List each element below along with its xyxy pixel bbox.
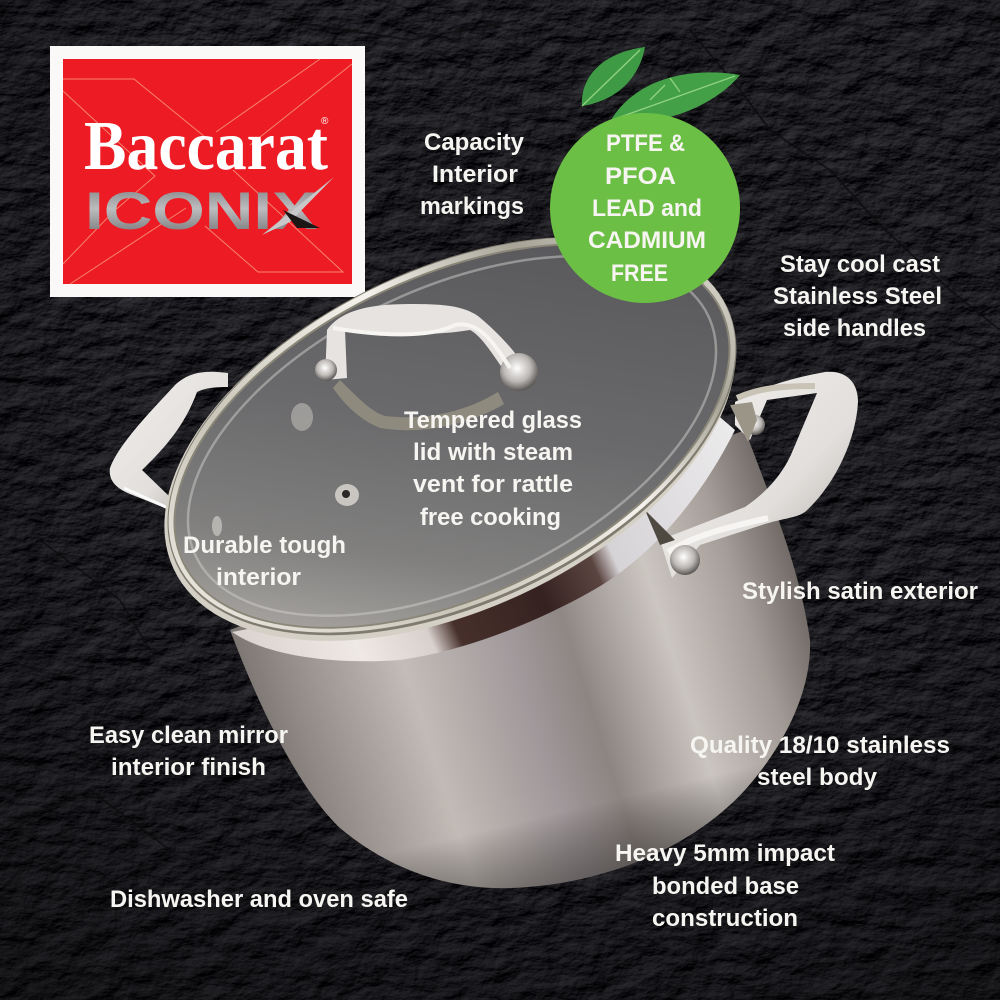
label: satin exterior: Stylish satin exterior	[742, 578, 978, 605]
badge: green free-from circle	[550, 113, 740, 303]
lid rivet: lower	[212, 516, 222, 536]
label: side handles: Stay cool cast	[780, 251, 940, 278]
label: capacity markings	[420, 129, 525, 220]
logo word: ICONIX: ICONIX	[85, 182, 317, 241]
left side handle	[110, 372, 228, 508]
label: durable interior: interior	[216, 564, 301, 591]
label: PTFE and PFOA free	[588, 130, 706, 287]
label: tempered glass lid	[404, 407, 582, 531]
pot body, satin steel	[230, 400, 810, 888]
label: impact bonded base	[615, 840, 835, 932]
brand logo: Baccarat Iconix	[50, 46, 365, 297]
polished band below rim	[232, 400, 735, 661]
label: tempered glass lid: lid with steam	[413, 439, 573, 466]
leaf: back	[582, 47, 645, 106]
label: dishwasher safe: Dishwasher and oven safe	[110, 886, 408, 913]
label: mirror interior: interior finish	[111, 754, 266, 781]
label: stainless body: steel body	[757, 764, 878, 791]
logo X swoosh	[262, 177, 334, 235]
label: side handles: Stainless Steel	[773, 283, 942, 310]
label: stainless body	[690, 732, 950, 791]
label: tempered glass lid: free cooking	[420, 504, 561, 531]
label: capacity markings: Capacity	[424, 129, 525, 156]
right side handle	[645, 372, 858, 578]
label: durable interior: Durable tough	[183, 532, 346, 559]
badge: green leaves	[582, 47, 740, 123]
label: stainless body: Quality 18/10 stainless	[690, 732, 950, 759]
label: side handles: side handles	[783, 315, 926, 342]
label: durable interior	[183, 532, 346, 591]
label: tempered glass lid: Tempered glass	[404, 407, 582, 434]
label: side handles	[773, 251, 942, 342]
lid handle	[315, 304, 538, 430]
label: impact bonded base: Heavy 5mm impact	[615, 840, 835, 867]
stockpot product image	[110, 237, 858, 888]
label: PTFE and PFOA free: PTFE &	[606, 130, 685, 157]
label: impact bonded base: bonded base	[652, 873, 799, 900]
label: capacity markings: Interior	[432, 161, 518, 188]
label: mirror interior: Easy clean mirror	[89, 722, 288, 749]
label: capacity markings: markings	[420, 193, 524, 220]
label: tempered glass lid: vent for rattle	[413, 471, 573, 498]
lid rivet: upper	[291, 403, 313, 431]
label: PTFE and PFOA free: LEAD and	[592, 195, 702, 222]
label: PTFE and PFOA free: CADMIUM	[588, 227, 706, 254]
glass lid with steel rim	[164, 237, 736, 641]
label: PTFE and PFOA free: FREE	[611, 260, 668, 287]
logo word: Baccarat: Baccarat	[84, 108, 328, 185]
leaf: front	[610, 72, 740, 123]
label: impact bonded base: construction	[652, 905, 798, 932]
lid steam vent	[335, 484, 359, 506]
feature labels	[89, 129, 978, 932]
logo word: registered mark: ®	[321, 116, 329, 127]
label: PTFE and PFOA free: PFOA	[605, 163, 676, 190]
label: mirror interior	[89, 722, 288, 781]
